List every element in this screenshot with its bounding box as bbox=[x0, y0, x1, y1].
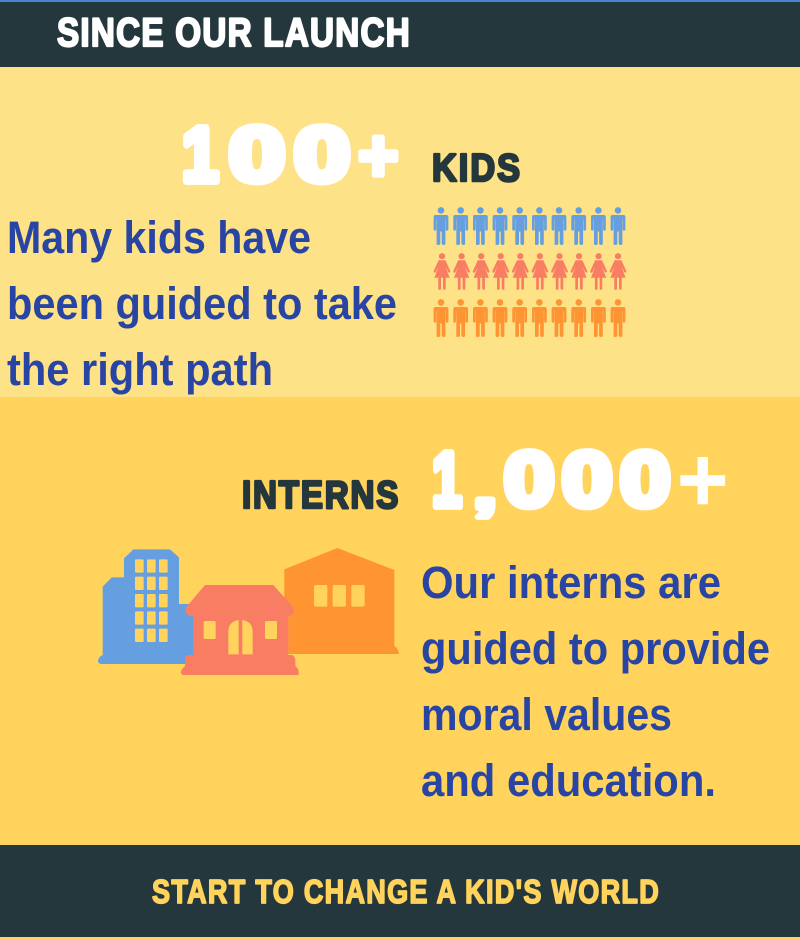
stat: 1,000+: , bbox=[473, 455, 497, 521]
icon row: blue people bbox=[434, 207, 625, 245]
icon: buildings bbox=[98, 548, 399, 675]
label: kids: KIDS bbox=[432, 146, 520, 189]
text block: kids description: the right path bbox=[7, 344, 273, 395]
label: interns: INTERNS bbox=[242, 472, 398, 517]
icon row: red people bbox=[434, 253, 626, 290]
footer band bbox=[0, 845, 800, 937]
icon row: orange people bbox=[434, 299, 625, 337]
icon: red house bbox=[181, 585, 299, 675]
stat: 1,000+ bbox=[432, 429, 728, 531]
stat: 1,000+: 1 bbox=[432, 438, 462, 523]
stat: 1,000+: 0 bbox=[620, 436, 670, 522]
panel: kids bbox=[7, 112, 626, 395]
text block: interns description bbox=[421, 557, 770, 806]
stat: 100+: 0 bbox=[294, 112, 350, 197]
header band bbox=[0, 0, 800, 67]
text block: kids description: Many kids have bbox=[7, 212, 311, 263]
icon: blue tower bbox=[98, 549, 197, 664]
stat: 1,000+: 0 bbox=[504, 436, 554, 522]
text block: interns description: moral values bbox=[421, 689, 672, 740]
stat: 100+: 1 bbox=[182, 112, 218, 198]
text block: kids description: been guided to take bbox=[7, 278, 397, 329]
text block: kids description bbox=[7, 212, 397, 395]
text block: interns description: guided to provide bbox=[421, 623, 770, 674]
heading: since our launch: SINCE OUR LAUNCH bbox=[57, 10, 410, 55]
text block: interns description: and education. bbox=[421, 755, 716, 806]
stat: 100+ bbox=[182, 112, 399, 198]
stat: 100+: + bbox=[358, 115, 399, 198]
stat: 1,000+: 0 bbox=[562, 436, 612, 522]
footer call to action: START TO CHANGE A KID'S WORLD bbox=[152, 875, 659, 911]
stat: 1,000+: + bbox=[677, 429, 728, 531]
text block: interns description: Our interns are bbox=[421, 557, 721, 608]
panel: interns bbox=[98, 429, 770, 806]
stat: 100+: 0 bbox=[229, 112, 285, 197]
icon: orange warehouse bbox=[284, 548, 399, 654]
